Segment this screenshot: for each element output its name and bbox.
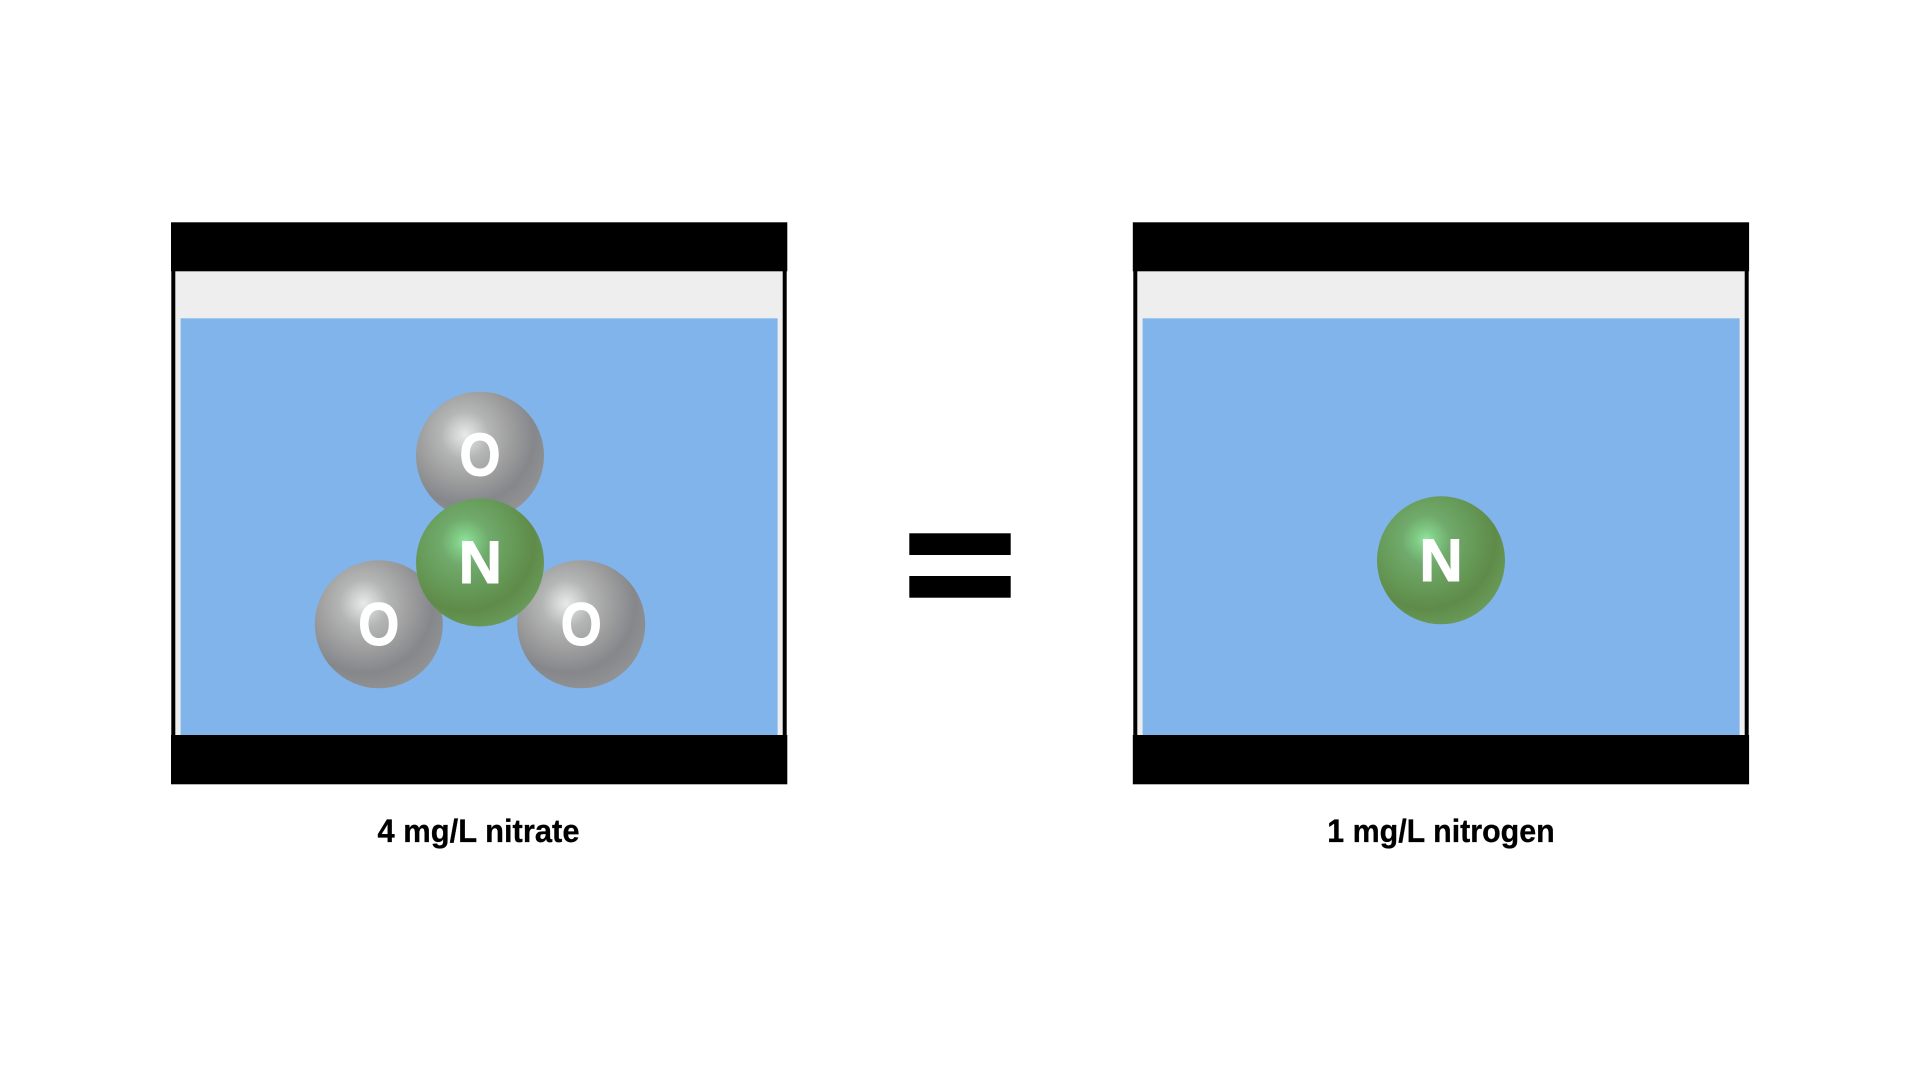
atom: nitrogen: N (459, 529, 502, 596)
right wall (1745, 271, 1749, 735)
atom: right oxygen (517, 560, 645, 688)
right wall (783, 271, 787, 735)
bottom bar (1133, 735, 1749, 784)
atom: nitrogen (416, 498, 544, 626)
atom: nitrogen (1377, 496, 1505, 624)
bottom bar (171, 735, 787, 784)
atom: left oxygen (315, 560, 443, 688)
top bar (171, 222, 787, 271)
equals sign (909, 533, 1011, 598)
left wall (1133, 271, 1137, 735)
panel: nitrogen beaker (1133, 222, 1749, 784)
atom: top oxygen (416, 392, 544, 520)
atom: right oxygen: O (561, 591, 602, 658)
label: nitrogen: 1 mg/L nitrogen (1327, 813, 1555, 849)
water fill (181, 318, 778, 735)
left wall (171, 271, 175, 735)
top bar (1133, 222, 1749, 271)
atom: top oxygen: O (460, 422, 500, 488)
atom: left oxygen: O (358, 591, 399, 658)
water fill (1143, 318, 1740, 735)
nitrate molecule (315, 392, 645, 688)
panel: nitrate beaker (171, 222, 787, 784)
atom: nitrogen: N (1419, 527, 1463, 594)
beaker glass interior (1137, 271, 1745, 735)
label: nitrate: 4 mg/L nitrate (378, 813, 580, 849)
beaker glass interior (175, 271, 783, 735)
